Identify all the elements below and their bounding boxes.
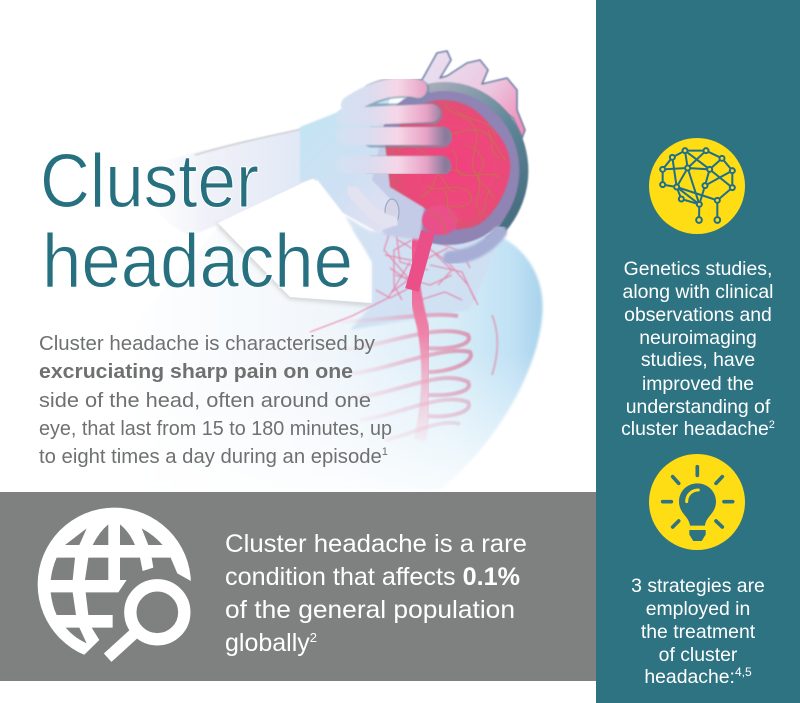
brain folds — [398, 105, 505, 235]
icon: globe with magnifier — [38, 508, 207, 675]
icon: light bulb — [649, 454, 745, 550]
brain — [385, 100, 510, 290]
forearm — [149, 126, 318, 236]
strategies text: the treatment — [641, 621, 756, 643]
title: headache — [42, 219, 353, 304]
prevalence text: 2 — [310, 630, 317, 645]
genetics text: along with clinical — [623, 281, 773, 303]
palm — [300, 80, 397, 232]
strategies text: 3 strategies are — [631, 575, 765, 597]
description text: eye, that last from 15 to 180 minutes, up — [39, 418, 392, 440]
spinal cord — [414, 235, 427, 440]
ear — [385, 199, 399, 225]
panel background — [0, 492, 596, 681]
title — [40, 139, 353, 304]
cerebellum — [422, 205, 458, 235]
strategies text: headache: — [644, 666, 735, 688]
prevalence text: Cluster headache is a rare — [225, 530, 527, 558]
panel: sidebar — [596, 0, 800, 703]
genetics text — [621, 258, 775, 440]
description text: Cluster headache is characterised by — [39, 333, 375, 355]
icon: brain network — [649, 138, 745, 234]
title: Cluster — [40, 139, 259, 224]
description text: side of the head, often around one — [39, 390, 371, 412]
description text: 1 — [382, 446, 388, 458]
sidebar background — [596, 0, 800, 703]
genetics text: studies, have — [641, 349, 755, 371]
genetics text: observations and — [624, 304, 772, 326]
genetics text: neuroimaging — [639, 327, 757, 349]
nerves — [310, 225, 497, 375]
strategies text: employed in — [646, 598, 750, 620]
description text: to eight times a day during an episode — [39, 446, 377, 468]
genetics text: 2 — [769, 419, 775, 431]
prevalence text: of the general population — [225, 596, 515, 624]
skull interior — [370, 85, 526, 245]
genetics text: Genetics studies, — [624, 258, 772, 280]
brainstem — [412, 232, 428, 290]
prevalence text — [225, 530, 527, 657]
genetics text: understanding of — [626, 396, 771, 418]
skull rim — [430, 87, 524, 240]
panel: prevalence — [0, 492, 596, 681]
back of hand fingers — [395, 51, 525, 138]
front fingers — [345, 87, 442, 166]
genetics text: improved the — [642, 373, 754, 395]
forearm top shadow — [195, 127, 311, 155]
prevalence text: condition that affects 0.1% — [225, 563, 520, 591]
strategies text: 4,5 — [735, 665, 752, 679]
face area — [362, 130, 425, 240]
neck — [345, 216, 500, 330]
strategies text: of cluster — [659, 644, 738, 666]
strategies text — [631, 575, 765, 688]
gap between arm and neck — [218, 178, 372, 304]
illustration: transparent figure holding head — [182, 49, 544, 486]
description text: excruciating sharp pain on one — [39, 361, 353, 383]
prevalence text: globally — [225, 629, 310, 657]
ribs — [340, 315, 471, 440]
thumb — [352, 190, 393, 222]
finger shadows — [372, 87, 442, 166]
genetics text: cluster headache — [621, 418, 769, 440]
description text — [39, 333, 392, 468]
torso and shoulder — [244, 230, 544, 486]
jaw wrap — [450, 232, 500, 258]
